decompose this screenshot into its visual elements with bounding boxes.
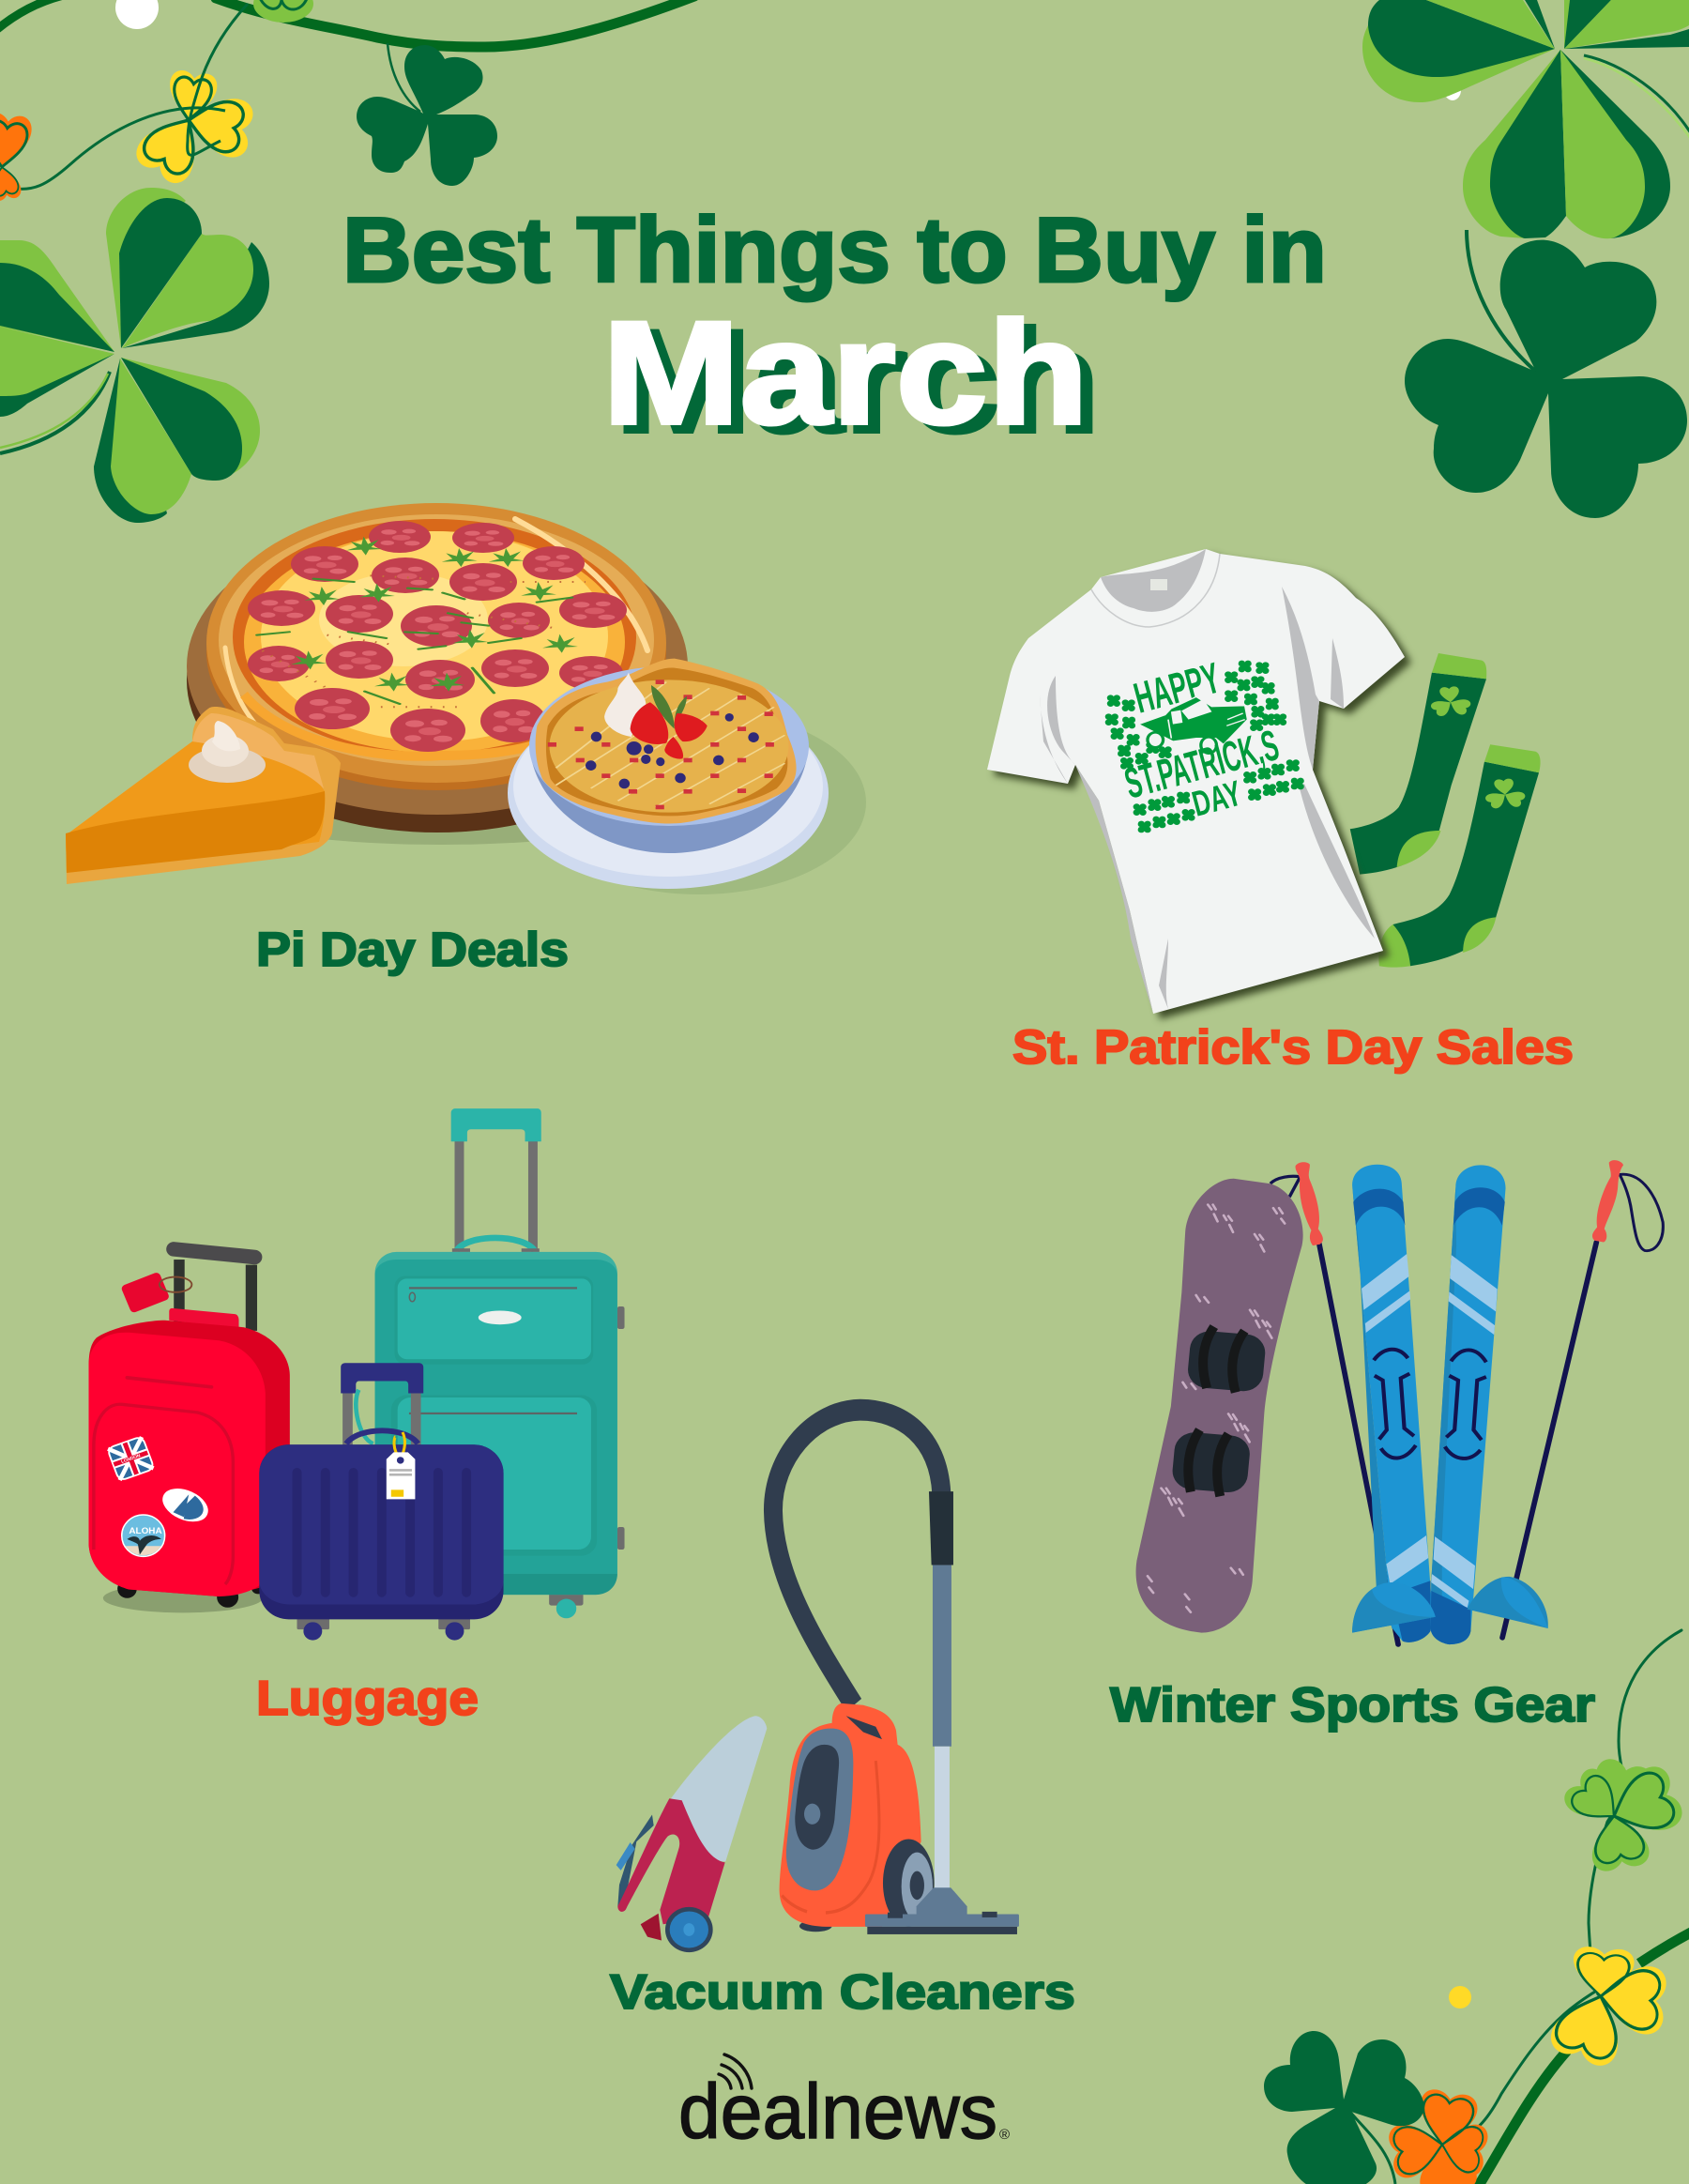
label: Winter Sports Gear: Winter Sports Gear <box>1110 1678 1595 1733</box>
title: Best Things to Buy in <box>342 198 1327 301</box>
red suitcase <box>89 1249 290 1612</box>
pie crust <box>536 659 797 824</box>
herbs <box>257 537 586 707</box>
sticker: aloha: ALOHA <box>129 1526 162 1536</box>
illustration: socks <box>1350 653 1541 968</box>
sock front <box>1378 744 1541 968</box>
light green clover right <box>1560 1756 1687 1873</box>
logo registered mark: ® <box>999 2127 1010 2143</box>
sticker: aloha <box>122 1515 165 1556</box>
sock back <box>1350 653 1486 875</box>
logo signal arcs <box>719 2054 752 2088</box>
illustration: luggage <box>89 1108 625 1641</box>
label: Pi Day Deals: Pi Day Deals <box>256 923 569 976</box>
binding <box>1171 1327 1267 1496</box>
whipped cream <box>189 721 266 783</box>
shirt text: day: DAY <box>1188 774 1246 825</box>
logo wordmark: dealnews <box>678 2068 997 2155</box>
shirt truck <box>1138 696 1248 754</box>
right pole, grip, strap, basket <box>1468 1160 1663 1638</box>
sticker: london <box>107 1436 155 1481</box>
shirt folds <box>1040 587 1375 1014</box>
shirt text: happy: HAPPY <box>1129 653 1225 723</box>
shirt text: st patricks: ST.PATRICK,S <box>1119 720 1284 808</box>
pizza crust <box>206 503 666 790</box>
label: St. Patrick's Day Sales: St. Patrick's Day Sales <box>1012 1020 1574 1074</box>
big clover top right <box>1362 0 1689 238</box>
shamrock top center <box>357 43 497 186</box>
label: Vacuum Cleaners: Vacuum Cleaners <box>610 1965 1075 2020</box>
left pole grip and basket <box>1296 1162 1436 1633</box>
shirt collar line <box>1091 554 1220 627</box>
shamrock right <box>1405 230 1687 518</box>
illustration: winter sports gear <box>1136 1160 1663 1644</box>
white spot behind clover <box>1444 80 1461 100</box>
illustration: pizza, pies <box>66 503 866 894</box>
yellow dot <box>1449 1986 1471 2008</box>
pepperoni <box>248 521 627 752</box>
snowboard <box>1136 1179 1303 1633</box>
pumpkin pie slice <box>66 707 341 884</box>
handheld vacuum <box>616 1716 767 1952</box>
shamrock bottom <box>1348 2110 1395 2184</box>
yellow clover right <box>1546 1946 1667 2070</box>
shirt body <box>987 549 1405 1014</box>
small light green clover top <box>253 0 313 23</box>
white dot top <box>115 0 159 29</box>
shirt tag <box>1150 579 1167 590</box>
title month: March <box>602 292 1088 455</box>
label: Luggage: Luggage <box>256 1672 479 1726</box>
pizza shadow <box>216 770 666 845</box>
illustration: vacuum cleaners <box>616 1410 1019 1952</box>
wooden board <box>187 518 688 832</box>
orange clover left edge <box>0 111 34 202</box>
title month shadow: March <box>615 300 1101 464</box>
big clover left <box>0 188 269 523</box>
top vine <box>0 0 694 47</box>
sticker: london: LONDON <box>120 1453 142 1465</box>
right ski <box>1431 1165 1506 1644</box>
left pole and strap <box>1271 1176 1398 1644</box>
sticker: paris <box>158 1483 213 1527</box>
logo: dealnews <box>678 2054 1010 2155</box>
navy suitcase <box>259 1363 504 1641</box>
shirt neck <box>1101 549 1206 612</box>
thin vines right <box>1450 1630 1681 2145</box>
shirt graphic <box>1105 653 1304 832</box>
orange clover bottom <box>1387 2087 1490 2184</box>
pie plate <box>508 696 866 894</box>
left ski <box>1352 1165 1431 1642</box>
thin vine and yellow clover top left <box>9 4 255 189</box>
dark shamrock bottom <box>1264 2031 1424 2184</box>
teal suitcase <box>375 1108 625 1618</box>
shirt mini clovers <box>1105 661 1304 832</box>
illustration: white t-shirt <box>987 549 1405 1014</box>
pie dish <box>529 666 809 853</box>
luggage tag <box>387 1432 415 1499</box>
canister vacuum <box>773 1410 1019 1934</box>
bottom right thick vine <box>1475 1932 1689 2184</box>
